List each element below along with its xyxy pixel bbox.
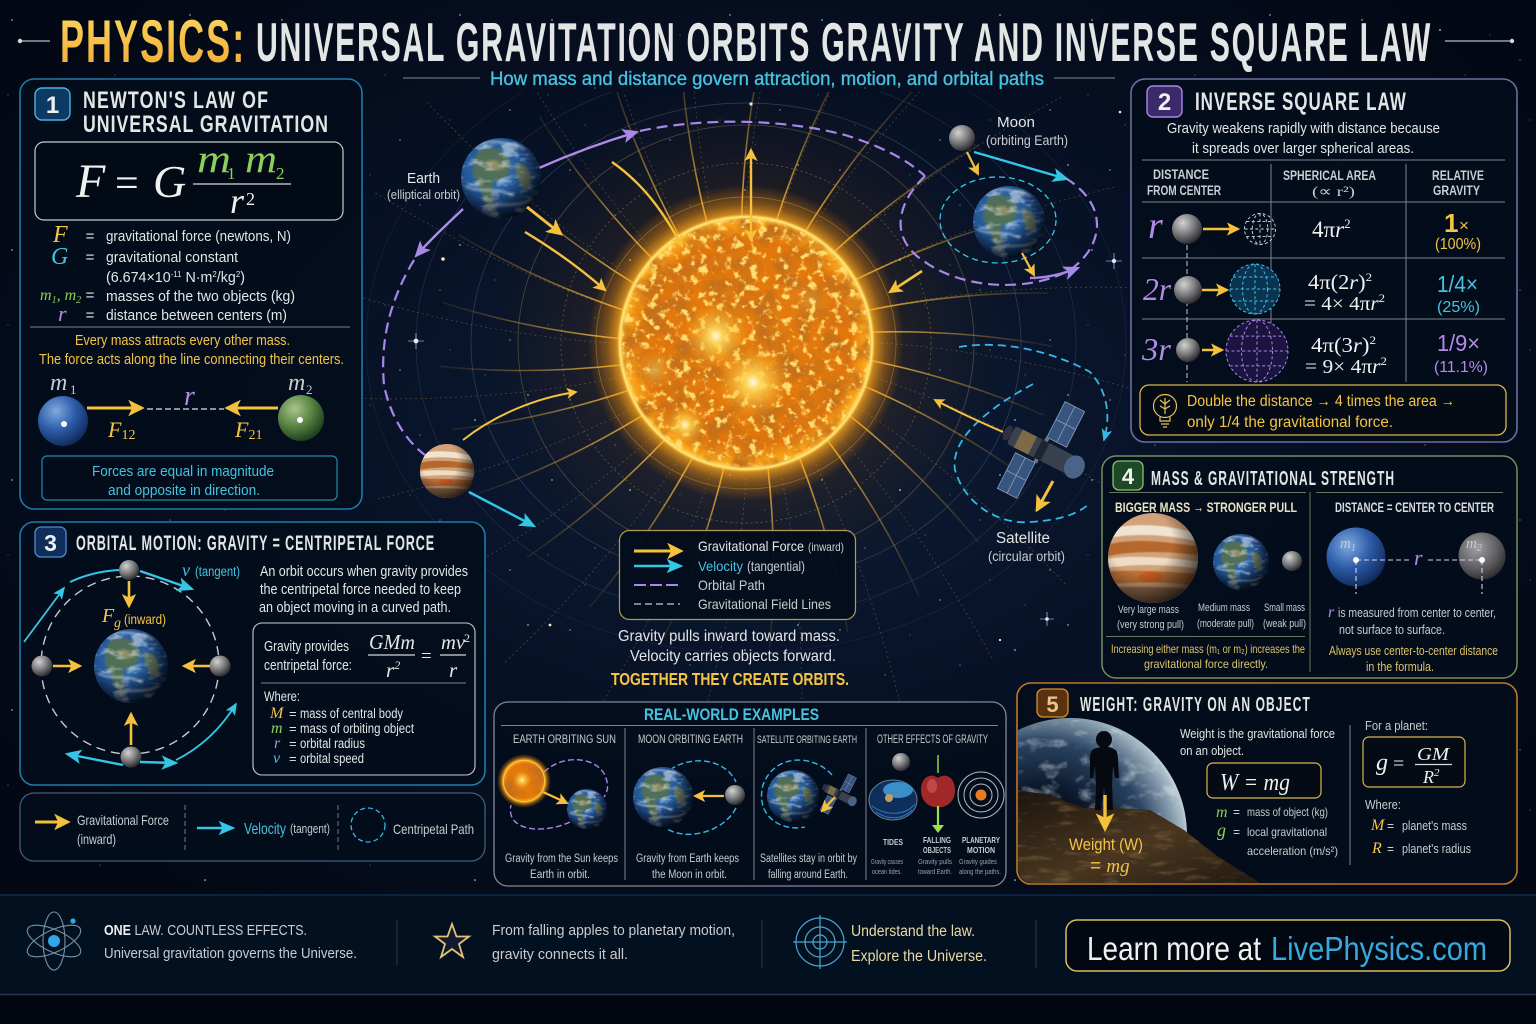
example: Satellite orbiting Earth — [757, 734, 866, 881]
icon: target — [793, 915, 847, 969]
row 3r: 3r — [1141, 331, 1172, 367]
weight text: acceleration (m/s²) — [1247, 844, 1338, 858]
variable definitions: 2 — [236, 270, 241, 279]
example: Satellite orbiting Earth: falling around Earth. — [768, 869, 848, 881]
column: bigger mass: (very strong pull) — [1117, 619, 1184, 631]
icon: Moon — [973, 186, 1045, 258]
row 2r — [1143, 264, 1480, 316]
yellow statement: The force acts along the line connecting their centers. — [39, 351, 344, 368]
legend: central: (tangential) — [747, 558, 805, 574]
formula box: m — [271, 720, 283, 737]
planet formula: 2 — [1434, 767, 1440, 779]
call to action: LivePhysics.com — [1271, 930, 1487, 967]
main formula — [35, 136, 343, 221]
heading 2: INVERSE SQUARE LAW — [1195, 88, 1406, 116]
yellow statement — [39, 332, 344, 368]
column: center to center: is measured from center to center, — [1338, 606, 1496, 620]
example: Moon orbiting Earth — [633, 732, 745, 881]
example: Other effects of gravity: toward Earth. — [918, 867, 952, 876]
table header: (∝ r²) — [1312, 185, 1355, 200]
legend: central: Velocity — [698, 558, 743, 574]
formula box: GMm — [369, 630, 415, 654]
formula box: r — [386, 658, 394, 682]
formula box: Where: — [264, 689, 300, 704]
orbit diagram: (tangent) — [195, 564, 240, 579]
orbital path: moon around Earth — [940, 177, 1056, 263]
example: Moon orbiting Earth: Gravity from Earth keeps — [636, 853, 739, 865]
footer text 3: Explore the Universe. — [851, 948, 987, 965]
formula box: r — [449, 658, 458, 682]
icon: gas planet — [420, 444, 474, 498]
legend: central — [620, 530, 856, 620]
footer text 3: Understand the law. — [851, 923, 975, 940]
row 3r: (11.1%) — [1434, 359, 1488, 376]
planet formula: = — [1387, 819, 1394, 833]
intro text: it spreads over larger spherical areas. — [1192, 140, 1414, 157]
column: bigger mass: (weak pull) — [1263, 618, 1306, 630]
diagram: two masses: 12 — [121, 428, 135, 443]
weight text: g — [1217, 820, 1226, 840]
badge 5: 5 — [1046, 692, 1059, 717]
orbit diagram — [24, 560, 240, 768]
footer text 1: ONE LAW. COUNTLESS EFFECTS. — [104, 923, 307, 939]
planet formula: R — [1371, 840, 1382, 857]
weight text: = — [1233, 825, 1240, 839]
labels: Satellite — [988, 530, 1065, 564]
row r: 2 — [1344, 216, 1351, 231]
explanatory text: the centripetal force needed to keep — [260, 582, 461, 598]
row r: (100%) — [1435, 236, 1481, 253]
main formula: = — [115, 161, 139, 207]
variable definitions: = — [86, 249, 95, 266]
column: bigger mass: Increasing either mass (m₁ or m₂) increases the — [1111, 642, 1305, 656]
footer text 1: Universal gravitation governs the Universe. — [104, 946, 357, 962]
intro text: Gravity weakens rapidly with distance because — [1167, 120, 1440, 137]
panel 3: Orbital motion — [20, 522, 485, 785]
table header: GRAVITY — [1433, 183, 1480, 198]
icon: star — [435, 924, 469, 957]
example: Other effects of gravity: OTHER EFFECTS OF GRAVITY — [877, 734, 988, 746]
main formula: 1 — [227, 164, 236, 183]
panel: Real-world examples — [494, 702, 1006, 886]
diagram: two masses: 21 — [248, 428, 262, 443]
panel 5: Weight — [1016, 682, 1518, 885]
row 3r: = 9× 4πr — [1305, 356, 1380, 378]
variable definitions: gravitational constant — [106, 249, 239, 266]
legend: orbital motion — [20, 793, 485, 861]
column: center to center: not surface to surface. — [1339, 623, 1445, 637]
weight text: m — [1216, 804, 1228, 821]
badge 1 — [35, 88, 70, 120]
icon: small moon — [949, 125, 975, 151]
row 3r — [1141, 320, 1488, 382]
formula box: = — [289, 751, 297, 766]
column: bigger mass: Small mass — [1264, 602, 1305, 614]
planet formula — [1363, 718, 1471, 857]
example: Moon orbiting Earth: MOON ORBITING EARTH — [638, 732, 743, 746]
weight text: = — [1233, 805, 1240, 819]
labels: Earth: Earth — [407, 170, 440, 187]
legend: orbital motion: Centripetal Path — [393, 821, 474, 837]
planet formula: = — [1393, 753, 1404, 775]
diagram: two masses: m — [50, 370, 67, 396]
orbit diagram: F — [101, 605, 115, 627]
row 2r: 2 — [1366, 270, 1372, 284]
callout: double the distance: only 1/4 the gravitational force. — [1187, 414, 1393, 431]
central takeaway text: TOGETHER THEY CREATE ORBITS. — [611, 669, 849, 689]
legend: orbital motion: Velocity — [244, 821, 286, 838]
icon: atom — [23, 912, 85, 970]
variable definitions: = — [86, 307, 95, 324]
labels: Moon: Moon — [997, 114, 1035, 131]
formula box: = — [421, 646, 432, 667]
planet formula: planet's radius — [1402, 841, 1471, 856]
column: center to center: in the formula. — [1366, 660, 1434, 674]
variable definitions: 2 — [212, 270, 217, 279]
planet formula: = — [1387, 842, 1394, 856]
formula box: mass of orbiting object — [300, 721, 414, 736]
example: Other effects of gravity: MOTION — [967, 845, 995, 855]
row 2r: 2r — [1143, 271, 1172, 307]
labels: Satellite: (circular orbit) — [988, 549, 1065, 564]
diagram: two masses: 1 — [70, 382, 76, 397]
formula box: mv — [441, 630, 466, 654]
panel 1: Newton's law — [20, 79, 362, 509]
example: Other effects of gravity: FALLING — [923, 835, 951, 845]
example: Other effects of gravity: Gravity pulls — [918, 857, 952, 866]
badge 3 — [35, 527, 66, 557]
planet formula: For a planet: — [1365, 718, 1428, 733]
column: bigger mass: (moderate pull) — [1197, 618, 1254, 630]
table header — [1147, 167, 1484, 200]
variable definitions: = — [86, 228, 95, 245]
footer — [0, 895, 1536, 1024]
diagram: two masses — [38, 370, 324, 446]
variable definitions: , m — [57, 287, 76, 304]
variable definitions: = — [86, 287, 95, 304]
call to action — [1066, 920, 1510, 971]
panel 4: Mass and gravitational strength — [1102, 456, 1517, 678]
formula box: orbital speed — [300, 751, 364, 766]
yellow statement: Every mass attracts every other mass. — [75, 332, 290, 349]
column: bigger mass — [1108, 499, 1306, 671]
example: Earth orbiting Sun: EARTH ORBITING SUN — [513, 732, 616, 746]
legend: orbital motion: (tangent) — [290, 821, 330, 836]
heading 3: ORBITAL MOTION: GRAVITY = CENTRIPETAL FORCE — [76, 531, 434, 555]
diagram: two masses: r — [184, 381, 195, 412]
explanatory text: An orbit occurs when gravity provides — [260, 564, 468, 580]
example: Other effects of gravity: along the paths. — [959, 867, 1001, 876]
badge 4: 4 — [1122, 464, 1135, 489]
table header: SPHERICAL AREA — [1283, 168, 1376, 183]
row 2r: 2 — [1379, 291, 1385, 305]
formula box: r — [274, 735, 281, 752]
example: Moon orbiting Earth: the Moon in orbit. — [652, 869, 727, 881]
main formula: r — [230, 181, 245, 221]
legend: central: Gravitational Force — [698, 538, 804, 554]
example: Earth orbiting Sun: Gravity from the Sun keeps — [505, 853, 618, 865]
row r: r — [1148, 205, 1163, 247]
panel 2: Inverse square law — [1131, 79, 1517, 442]
labels: Satellite: Satellite — [996, 530, 1050, 547]
icon: satellite — [979, 383, 1108, 520]
formula box: orbital radius — [300, 736, 365, 751]
badge 2: 2 — [1158, 89, 1171, 116]
orbit diagram: (inward) — [124, 611, 166, 627]
row r: 4πr — [1312, 217, 1344, 242]
diagram: two masses: F — [235, 417, 248, 442]
example: Other effects of gravity: TIDES — [883, 837, 903, 847]
force arrows — [463, 150, 1067, 526]
callout: double the distance — [1140, 385, 1506, 435]
legend: orbital motion: (inward) — [77, 831, 116, 847]
weight text — [1180, 726, 1338, 858]
illustration: person on a hill before a planet — [1018, 718, 1260, 883]
variable definitions: F — [52, 222, 68, 248]
central takeaway text — [611, 628, 849, 689]
variable definitions: (6.674×10 — [106, 270, 172, 286]
subtitle: How mass and distance govern attraction, motion, and orbital paths — [490, 69, 1044, 90]
heading 5: WEIGHT: GRAVITY ON AN OBJECT — [1080, 694, 1310, 716]
variable definitions: distance between centers (m) — [106, 307, 287, 324]
variable definitions: r — [58, 301, 67, 326]
footer text 2: gravity connects it all. — [492, 946, 628, 963]
row 2r: 4π(2r) — [1308, 270, 1365, 294]
row r: 1 — [1444, 208, 1458, 238]
callout: equal and opposite — [42, 456, 337, 500]
formula box: = — [289, 721, 297, 736]
orbital path: satellite — [955, 345, 1107, 522]
diagram: two masses: m — [288, 370, 305, 396]
example: Other effects of gravity: ocean tides. — [872, 867, 902, 876]
formula box: = — [289, 706, 297, 721]
row r — [1148, 205, 1481, 253]
variable definitions: 2 — [76, 295, 81, 306]
row 2r: (25%) — [1437, 299, 1480, 316]
labels: Moon — [986, 114, 1068, 148]
callout: equal and opposite: and opposite in direction. — [108, 482, 260, 499]
legend: orbital motion: Gravitational Force — [77, 812, 169, 828]
example: Other effects of gravity: Gravity causes — [871, 857, 903, 866]
formula box: mass of central body — [300, 706, 403, 721]
variable definitions: -11 — [171, 270, 182, 279]
label: weight: Weight (W) — [1069, 835, 1143, 854]
example: Satellite orbiting Earth: SATELLITE ORBITING EARTH — [757, 734, 857, 746]
variable definitions: 1 — [52, 295, 57, 306]
icon: Earth (main) — [461, 138, 541, 218]
example: Earth orbiting Sun: Earth in orbit. — [530, 869, 590, 881]
title: UNIVERSAL GRAVITATION ORBITS GRAVITY AND INVERSE SQUARE LAW — [256, 13, 1430, 73]
column: center to center: r — [1328, 604, 1335, 621]
formula box: M — [269, 705, 285, 722]
formula box: Gravity provides — [264, 639, 349, 655]
footer text 3 — [851, 923, 987, 965]
formula box: = — [289, 736, 297, 751]
icon: light bulb — [1154, 394, 1176, 427]
footer text 2: From falling apples to planetary motion, — [492, 922, 735, 939]
column: center to center: r — [1414, 545, 1423, 570]
table header: DISTANCE — [1153, 167, 1209, 182]
main formula: G — [153, 156, 186, 207]
central diagram: sun and orbits — [364, 92, 1130, 702]
example: Other effects of gravity: OBJECTS — [923, 845, 951, 855]
example: Satellite orbiting Earth: Satellites stay in orbit by — [760, 853, 857, 865]
weight text: Weight is the gravitational force — [1180, 726, 1335, 741]
planet formula: Where: — [1365, 797, 1401, 812]
badge 1: 1 — [46, 92, 59, 119]
badge 5 — [1037, 689, 1068, 717]
row 3r: 1/9× — [1437, 330, 1480, 356]
column: bigger mass: Medium mass — [1198, 602, 1250, 614]
orbit diagram: g — [114, 616, 121, 631]
explanatory text: an object moving in a curved path. — [259, 600, 451, 616]
label: weight: = mg — [1090, 856, 1130, 877]
badge 3: 3 — [44, 530, 57, 556]
table header: FROM CENTER — [1147, 183, 1221, 198]
diagram: two masses: F — [108, 417, 121, 442]
column: center to center: m — [1340, 536, 1351, 552]
labels: Earth — [387, 170, 460, 202]
legend: central: (inward) — [808, 540, 844, 554]
heading 1: UNIVERSAL GRAVITATION — [83, 112, 328, 138]
formula box: 2 — [394, 658, 400, 672]
variable definitions: masses of the two objects (kg) — [106, 288, 295, 305]
icon: sun — [588, 185, 904, 501]
badge 4 — [1113, 461, 1143, 490]
column: bigger mass: gravitational force directly. — [1144, 657, 1268, 671]
variable definitions: gravitational force (newtons, N) — [106, 228, 291, 245]
column: center to center — [1326, 499, 1506, 674]
footer text 2 — [492, 922, 735, 963]
formula box: v — [273, 750, 281, 767]
variable definitions: ) — [240, 270, 245, 286]
planet formula: planet's mass — [1402, 818, 1467, 833]
planet formula: GM — [1417, 744, 1450, 764]
badge 2 — [1147, 86, 1182, 117]
labels: Moon: (orbiting Earth) — [986, 133, 1068, 148]
variable definitions: m — [40, 287, 52, 304]
planet formula: M — [1370, 817, 1386, 834]
formula box: 2 — [464, 631, 470, 645]
row r: × — [1459, 216, 1469, 235]
table header: RELATIVE — [1432, 168, 1484, 183]
main formula: 2 — [246, 189, 255, 209]
variable definitions: N·m — [181, 270, 212, 286]
variable definitions — [40, 222, 295, 326]
column: center to center: m — [1466, 536, 1477, 552]
heading: real-world examples: REAL-WORLD EXAMPLES — [644, 706, 819, 724]
planet formula: R — [1423, 767, 1434, 787]
variable definitions: G — [51, 244, 68, 270]
variable definitions: /kg — [217, 270, 236, 286]
example: Other effects of gravity — [869, 734, 1004, 876]
row 2r: = 4× 4πr — [1304, 293, 1378, 315]
main formula: m — [245, 136, 277, 181]
diagram: two masses: 2 — [306, 382, 312, 397]
formula box — [253, 623, 475, 775]
heading 1: NEWTON'S LAW OF — [83, 88, 268, 114]
heading 4: MASS & GRAVITATIONAL STRENGTH — [1151, 468, 1394, 490]
callout: equal and opposite: Forces are equal in magnitude — [92, 463, 274, 480]
column: center to center: 2 — [1477, 543, 1482, 554]
orbital path: Earth elliptical orbit — [383, 122, 1097, 455]
example: Other effects of gravity: PLANETARY — [962, 835, 1000, 845]
row 3r: 2 — [1369, 333, 1376, 347]
weight text: local gravitational — [1247, 825, 1327, 839]
weight text: on an object. — [1180, 743, 1244, 758]
label: weight — [1069, 835, 1143, 877]
row 2r: 1/4× — [1437, 271, 1478, 297]
main formula: m — [197, 136, 231, 181]
legend: central: Orbital Path — [698, 577, 765, 593]
call to action: Learn more at — [1087, 930, 1261, 967]
title: PHYSICS: — [60, 9, 244, 75]
row 3r: 4π(3r) — [1311, 333, 1369, 357]
formula box: centripetal force: — [264, 658, 352, 674]
orbit diagram: v — [182, 560, 190, 580]
main formula: F — [75, 155, 106, 208]
footer text 1 — [104, 923, 357, 962]
column: bigger mass: Very large mass — [1118, 604, 1179, 616]
callout: double the distance: Double the distance → 4 times the area → — [1187, 393, 1455, 410]
example: Other effects of gravity: Gravity guides — [959, 857, 997, 866]
column: center to center: 1 — [1351, 543, 1356, 554]
column: bigger mass: BIGGER MASS → STRONGER PULL — [1115, 499, 1297, 515]
column: center to center: Always use center-to-center distance — [1329, 644, 1498, 658]
row 3r: 2 — [1381, 354, 1387, 368]
labels: Earth: (elliptical orbit) — [387, 188, 460, 202]
intro text — [1167, 120, 1440, 157]
central takeaway text: Gravity pulls inward toward mass. — [618, 628, 840, 645]
weight text: W = mg — [1220, 770, 1290, 796]
explanatory text — [259, 564, 468, 616]
weight text: mass of object (kg) — [1247, 805, 1328, 819]
planet formula: g — [1376, 750, 1388, 776]
bright stars — [408, 102, 1122, 641]
legend: central: Gravitational Field Lines — [698, 596, 831, 612]
central takeaway text: Velocity carries objects forward. — [630, 648, 836, 665]
main formula: 2 — [276, 164, 284, 183]
heading 1 — [83, 88, 328, 138]
example: Earth orbiting Sun — [497, 732, 618, 881]
